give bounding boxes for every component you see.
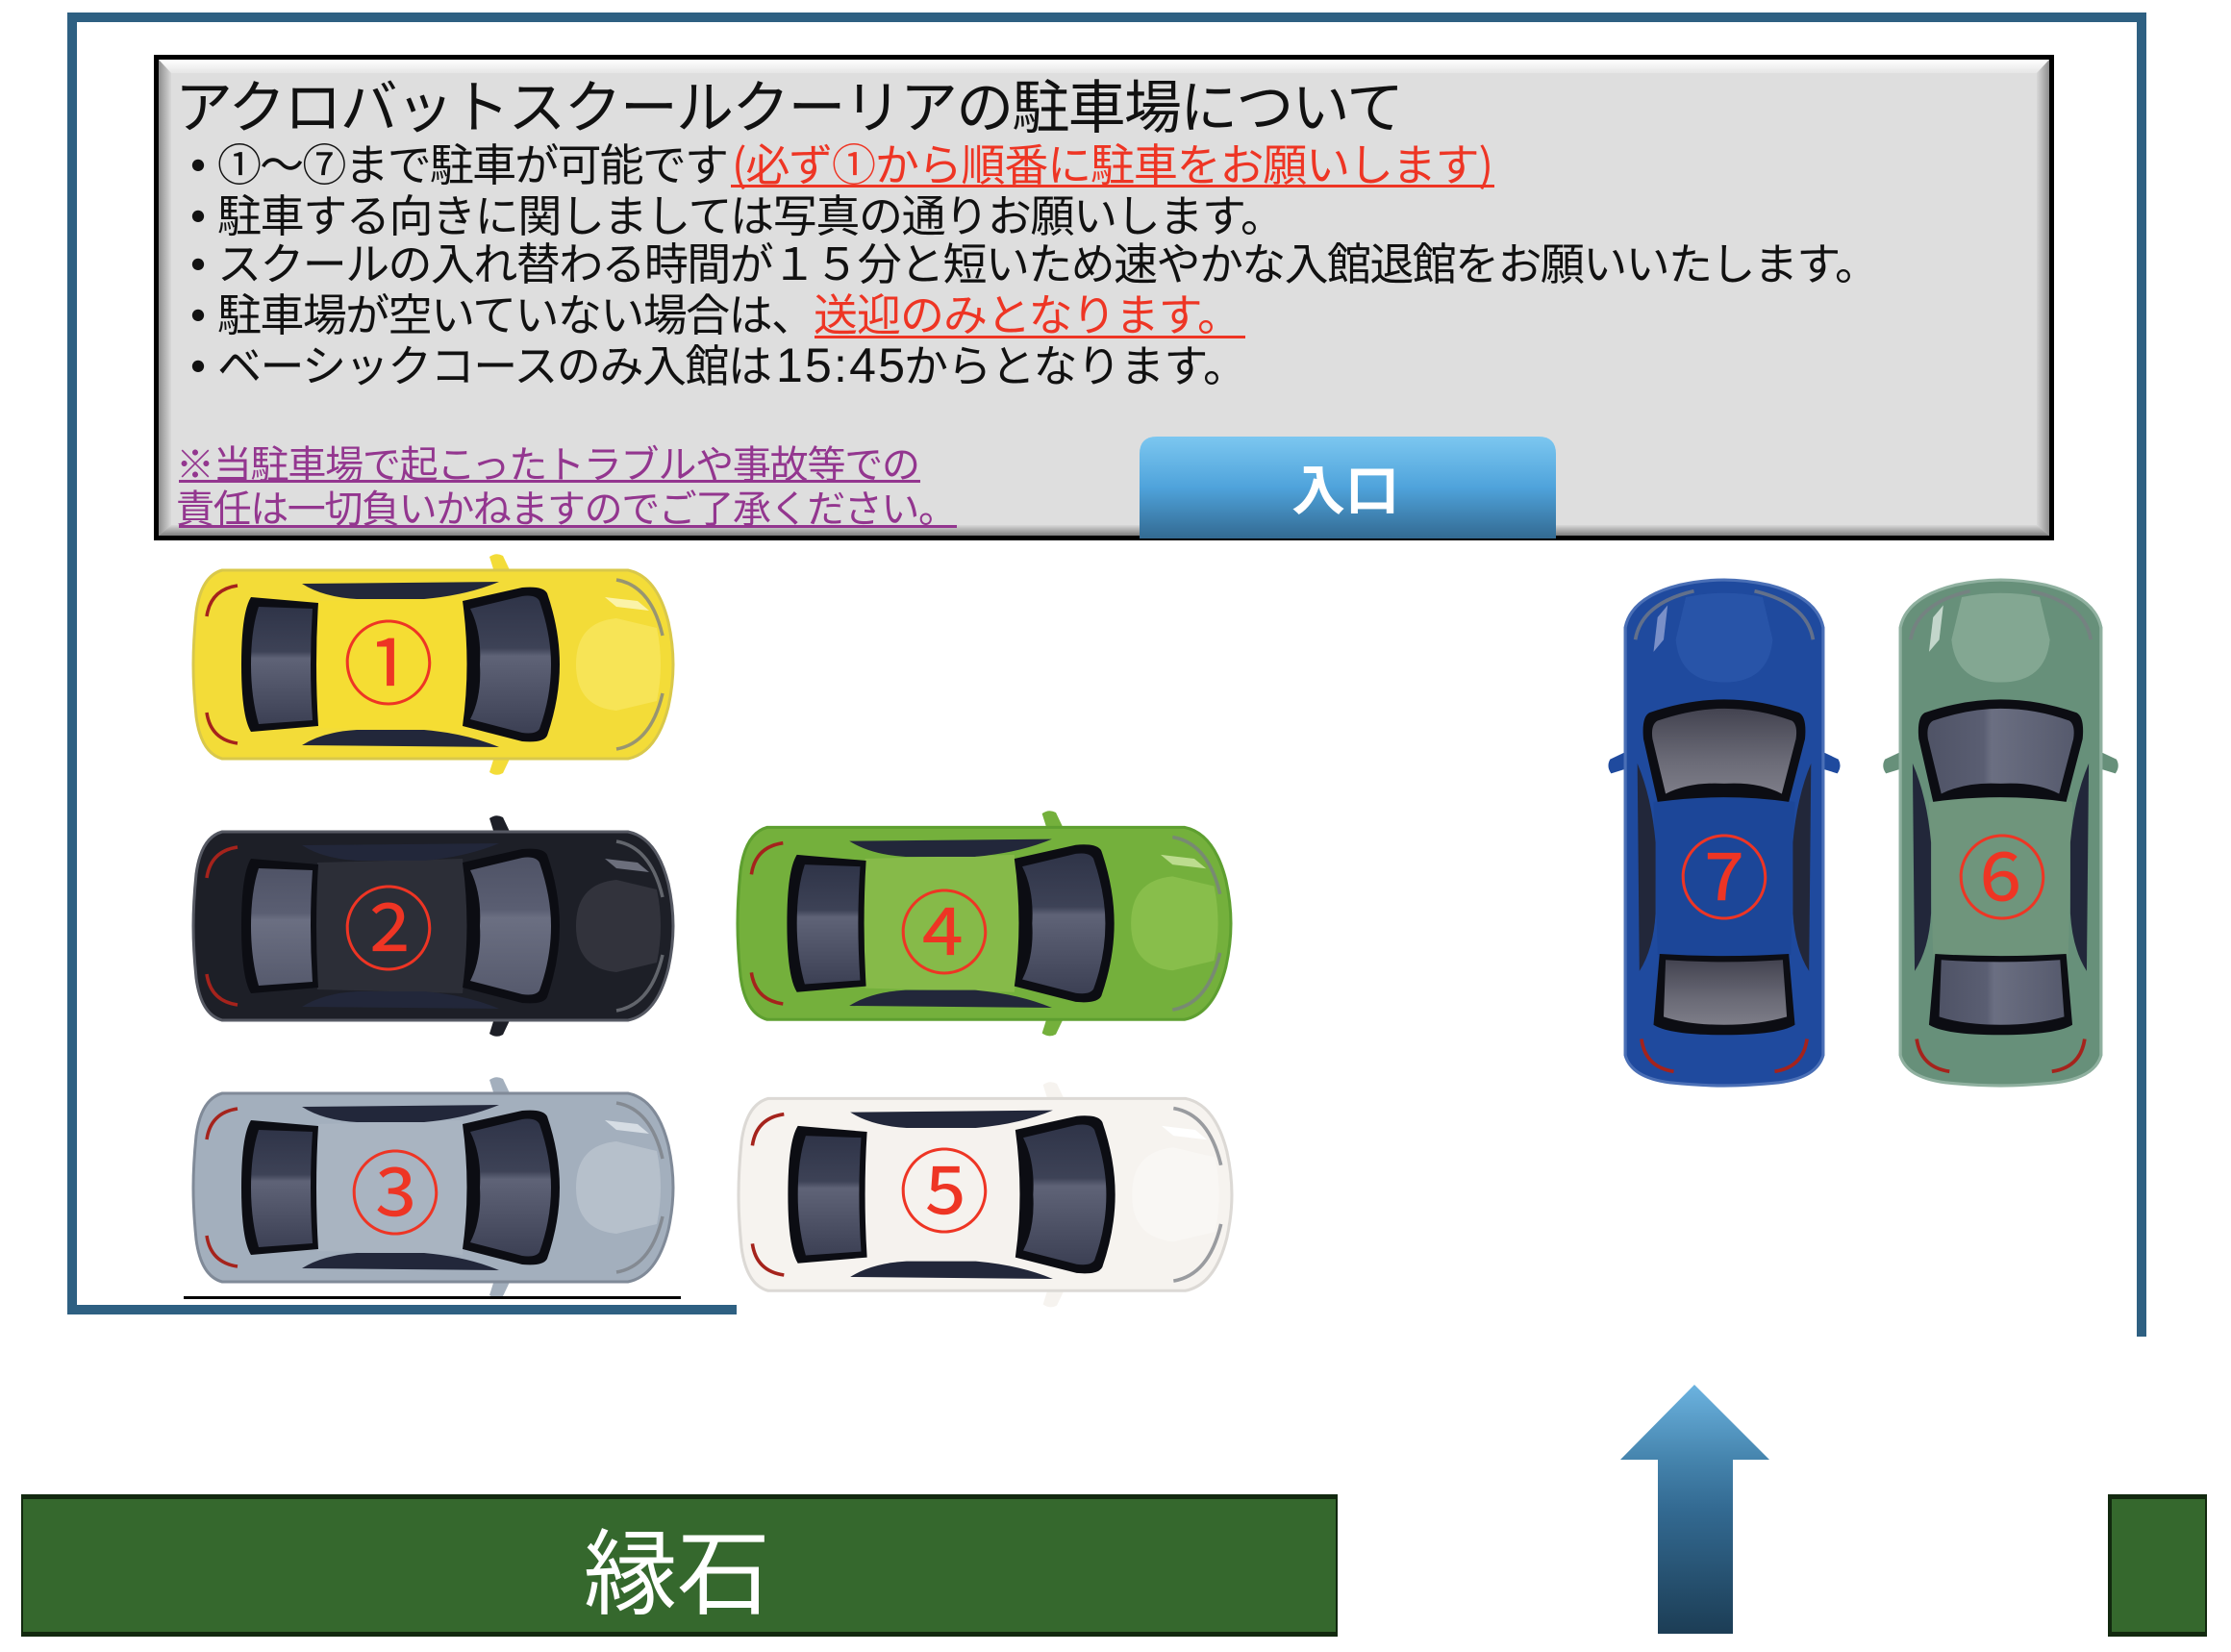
- notice line 2: 駐車する向きに関しましては写真の通りお願いします。: [217, 182, 1285, 245]
- notice line 5: ベーシックコースのみ入館は: [217, 332, 772, 395]
- notice line 1: [170, 122, 1494, 203]
- entrance button: 入口: [1291, 448, 1399, 526]
- car 4: green: [738, 811, 1231, 1036]
- car 3: silver: [193, 1077, 673, 1298]
- car 5: white: ⑤: [898, 1120, 990, 1252]
- entrance button: [1140, 437, 1556, 538]
- car 6: sage green: [1883, 580, 2118, 1086]
- car 2: black: [193, 815, 673, 1037]
- parking limit line: [184, 1296, 681, 1299]
- curb left: [21, 1494, 1338, 1637]
- notice line 4: ・: [170, 272, 226, 353]
- curb right: [2108, 1494, 2207, 1637]
- car 5: white: [739, 1082, 1232, 1307]
- parking lot frame: [67, 13, 2146, 1337]
- car 3: silver: ③: [349, 1122, 441, 1254]
- notice line 1: ①～⑦まで駐車が可能です: [217, 131, 729, 194]
- notice line 4: [170, 272, 1245, 353]
- car 7: blue: ⑦: [1678, 807, 1770, 939]
- notice line 5: [170, 323, 1247, 404]
- heading: アクロバットスクールクーリアの駐車場について: [175, 62, 1404, 145]
- curb left: 縁石: [584, 1498, 770, 1634]
- car 6: sage green: ⑥: [1956, 807, 2048, 939]
- notice line 1: (必ず①から順番に駐車をお願いします): [732, 131, 1493, 194]
- notice line 1: ・: [170, 122, 226, 203]
- entry arrow: [1620, 1385, 1769, 1634]
- panel: parking notice: [154, 55, 2054, 540]
- notice line 5: ・: [170, 323, 226, 404]
- notice line 5: からとなります。: [904, 332, 1247, 395]
- notice line 4: 送迎のみとなります。: [814, 281, 1241, 344]
- car 1: yellow: ①: [342, 592, 435, 724]
- notice line 2: ・: [170, 173, 226, 254]
- car 1: yellow: [193, 554, 673, 775]
- disclaimer: 責任は一切負いかねますのでご了承ください。: [176, 478, 957, 534]
- car 7: blue: [1608, 580, 1841, 1086]
- car 2: black: ②: [342, 858, 435, 989]
- notice line 3: スクールの入れ替わる時間が１５分と短いため速やかな入館退館をお願いいたします。: [217, 230, 1879, 293]
- disclaimer: ※当駐車場で起こったトラブルや事故等での: [176, 434, 920, 489]
- car 4: green: ④: [898, 862, 990, 993]
- disclaimer: [176, 434, 957, 534]
- notice line 5: 15:45: [776, 338, 905, 392]
- notice line 4: 駐車場が空いていない場合は、: [217, 281, 815, 344]
- notice line 3: ・: [170, 221, 226, 302]
